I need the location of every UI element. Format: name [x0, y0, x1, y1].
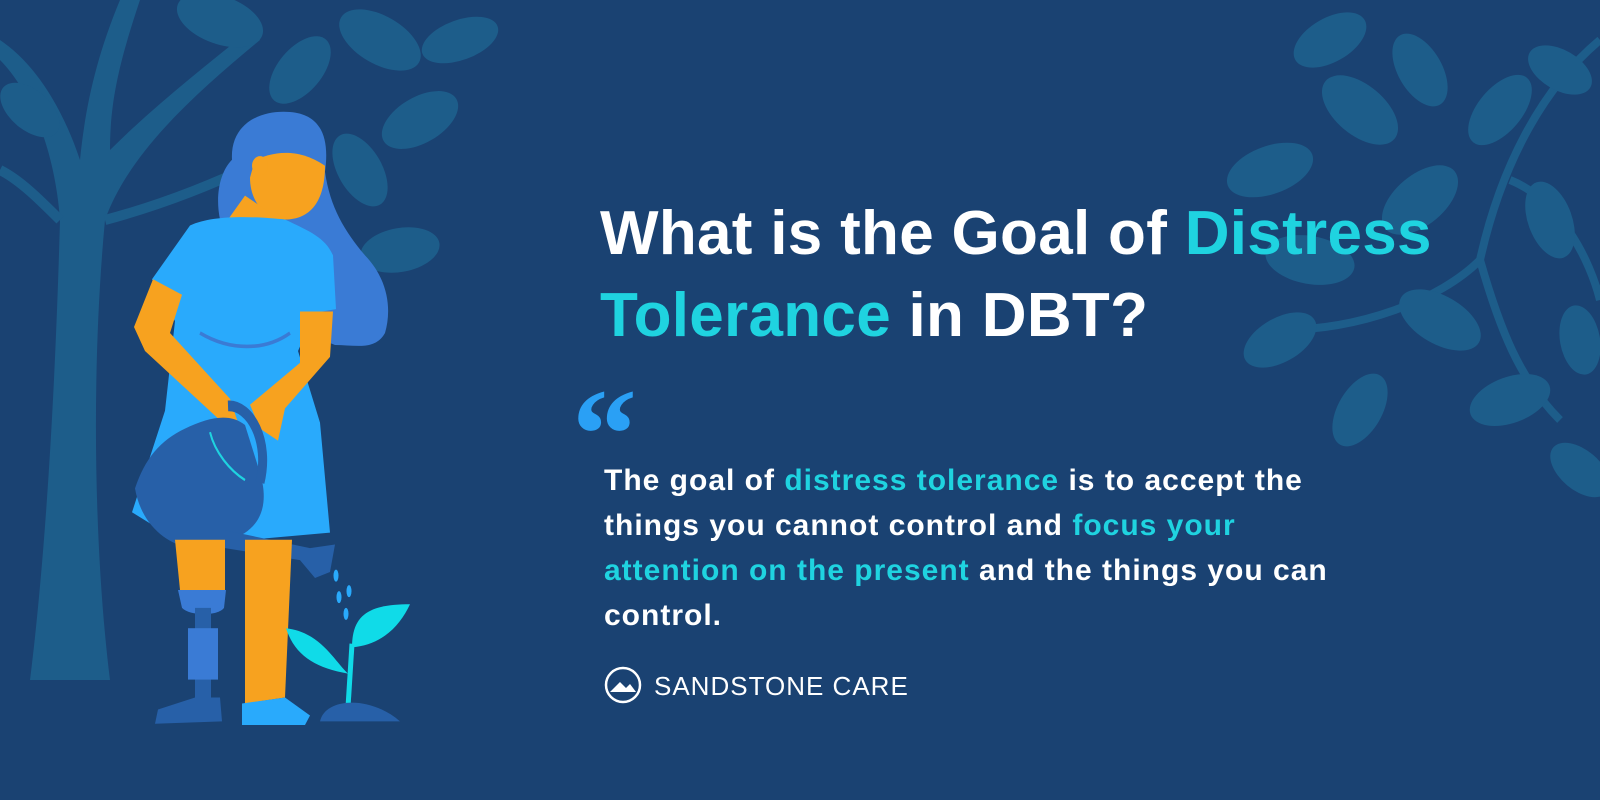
quote text: things you cannot control and focus your: [604, 509, 1236, 542]
quote text: [604, 464, 1328, 632]
plant: [348, 644, 352, 707]
quote text: attention on the present and the things you can: [604, 554, 1328, 587]
logo icon: [604, 666, 642, 704]
face: [250, 153, 325, 220]
legs: [175, 540, 225, 590]
title: What is the Goal of Distress: [600, 199, 1432, 268]
water drops: [334, 570, 338, 582]
title: Tolerance in DBT?: [600, 281, 1148, 350]
icon: quote mark: “: [572, 363, 637, 507]
arms: [134, 279, 238, 423]
illustration: woman watering plant: [132, 112, 410, 725]
logo text: SANDSTONE CARE: [654, 671, 909, 701]
logo: Sandstone Care: [604, 666, 909, 704]
quote text: control.: [604, 599, 722, 632]
neck: [228, 196, 280, 229]
background: right tree leaves: [1227, 12, 1600, 498]
dress: [132, 217, 336, 548]
watering can: [135, 418, 264, 548]
background: left tree: [0, 0, 498, 680]
quote text: The goal of distress tolerance is to accept the: [604, 464, 1303, 497]
title: [600, 199, 1432, 350]
hair: [218, 112, 388, 346]
